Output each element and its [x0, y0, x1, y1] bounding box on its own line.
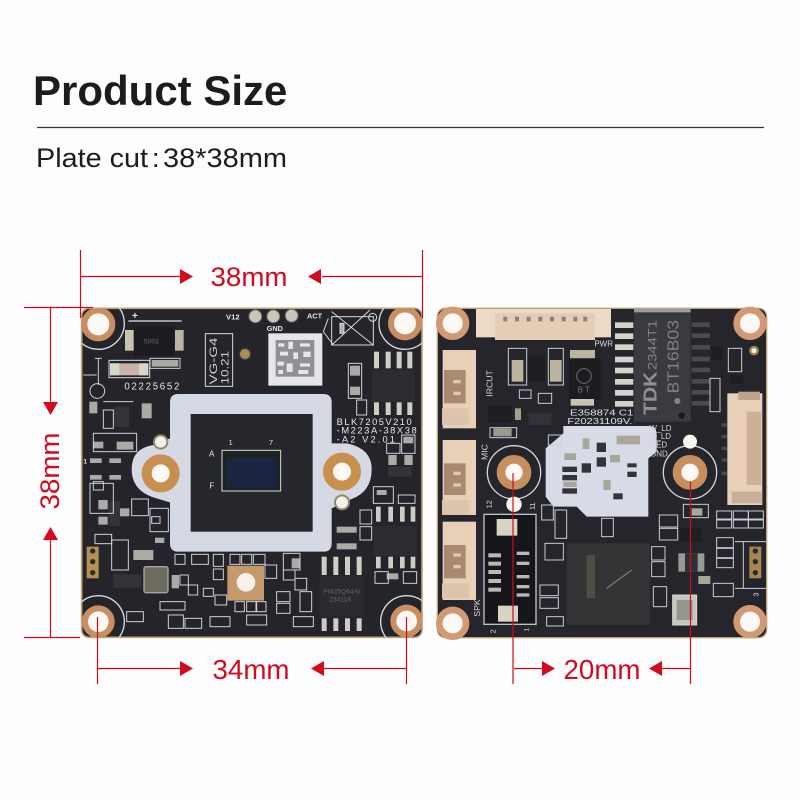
small surface-mount components	[89, 360, 413, 588]
silkscreen labels: V12	[226, 313, 240, 322]
title: Product Size	[33, 67, 287, 114]
corner mounting holes	[82, 308, 422, 638]
top connector: PWR	[594, 340, 613, 349]
right connector	[722, 392, 762, 505]
TDK network transformer	[634, 309, 691, 422]
diode component	[125, 321, 184, 356]
silkscreen text	[485, 408, 760, 633]
center mounting holes	[147, 458, 356, 487]
main SoC chip	[567, 543, 650, 625]
square gold pad	[227, 566, 264, 601]
silkscreen text: GND	[650, 449, 668, 458]
left connector: IRCUT: IRCUT	[485, 370, 495, 397]
silkscreen text: 2	[488, 629, 497, 633]
flash memory chips: FM25Q64AI	[324, 588, 360, 595]
dimension: bottom 34mm	[98, 617, 406, 685]
board body	[82, 308, 422, 637]
silkscreen labels: GND	[267, 324, 283, 333]
flash memory chips: 234116	[329, 597, 351, 604]
silkscreen labels: BLK7205V210	[337, 417, 412, 427]
rotated version label	[205, 334, 233, 386]
left connector: MIC	[442, 440, 489, 515]
left connector: SPK	[442, 522, 482, 617]
silkscreen text: 11	[528, 502, 537, 510]
transformer pins	[615, 322, 710, 407]
silkscreen text: 12	[485, 500, 494, 508]
crystal oscillator	[673, 595, 697, 625]
image sensor chip: F	[209, 481, 214, 490]
top connector	[476, 309, 613, 349]
image sensor chip: A	[209, 450, 215, 459]
silkscreen text: W_LD	[649, 424, 672, 433]
dimension: bottom 20mm: 20mm	[564, 654, 640, 685]
subtitle: plate cut	[36, 143, 287, 173]
SPI module footprint	[484, 514, 536, 624]
TDK network transformer: 2344T1	[646, 320, 660, 370]
dimension: bottom 34mm: 34mm	[212, 654, 290, 685]
diode component: 5003	[144, 338, 159, 345]
flash memory chips	[319, 352, 417, 631]
silkscreen labels	[83, 311, 417, 465]
left connector: MIC: MIC	[479, 444, 489, 460]
silver shield frame around sensor	[132, 394, 372, 552]
gold header pads	[749, 547, 761, 578]
subtitle: plate cut: Plate cut	[36, 143, 149, 173]
silkscreen text: 3	[751, 593, 760, 597]
transistors	[108, 407, 412, 588]
rotated version label: 10.21	[220, 351, 232, 384]
silkscreen text: R_LD	[651, 432, 671, 441]
crossed relay outline	[323, 310, 377, 345]
panel: back board	[437, 308, 767, 638]
power diode and inductor group: B T	[578, 385, 590, 394]
top test pads	[249, 309, 298, 323]
small plated holes	[506, 347, 758, 512]
TDK network transformer: BT16B03	[665, 320, 682, 393]
silkscreen text: E358874 C1	[570, 408, 634, 418]
dimension: top 38mm	[80, 250, 422, 318]
image sensor chip: 1	[229, 438, 233, 447]
TDK network transformer: TDK	[640, 371, 661, 415]
rotated version label: VG-G4	[208, 338, 220, 384]
inductor	[144, 567, 168, 593]
gold header pads	[87, 547, 99, 578]
silkscreen labels: ACT	[307, 312, 323, 321]
QR data matrix label	[268, 333, 322, 386]
silkscreen labels: -A2 V2.01	[337, 434, 395, 444]
dimension: top 38mm: 38mm	[210, 262, 288, 292]
image sensor chip	[209, 438, 281, 491]
silkscreen labels: 1	[83, 458, 87, 465]
silkscreen outlines	[83, 358, 417, 628]
image sensor chip: 7	[269, 438, 273, 447]
power section components	[678, 347, 743, 584]
corner mounting holes	[439, 310, 763, 637]
power diode and inductor group	[488, 350, 601, 436]
left connector: IRCUT	[442, 350, 495, 428]
gold via	[239, 348, 251, 360]
silkscreen labels: 02225652	[124, 382, 179, 393]
silkscreen text: LED	[652, 441, 667, 450]
board body	[437, 308, 767, 638]
silkscreen text: F20231109V.	[567, 416, 632, 426]
sensor pad area	[191, 414, 313, 532]
shield components	[562, 436, 640, 499]
left connector: SPK: SPK	[472, 599, 482, 617]
subtitle: plate cut: 38*38mm	[163, 143, 287, 173]
silkscreen labels: +	[132, 311, 138, 322]
small plated holes	[154, 435, 349, 509]
inner mounting holes	[487, 446, 717, 499]
dimension: left 38mm: 38mm	[35, 432, 65, 510]
dimension: left 38mm	[24, 307, 93, 638]
silkscreen labels: -M223A-38X38	[337, 426, 417, 436]
silkscreen outlines	[490, 348, 766, 626]
dimension: bottom 20mm	[513, 473, 690, 685]
silver shield area	[546, 426, 657, 517]
ceramic capacitor	[109, 360, 150, 378]
silkscreen text: 1	[524, 628, 531, 632]
subtitle: plate cut: :	[152, 143, 160, 173]
panel: front board	[80, 308, 423, 638]
